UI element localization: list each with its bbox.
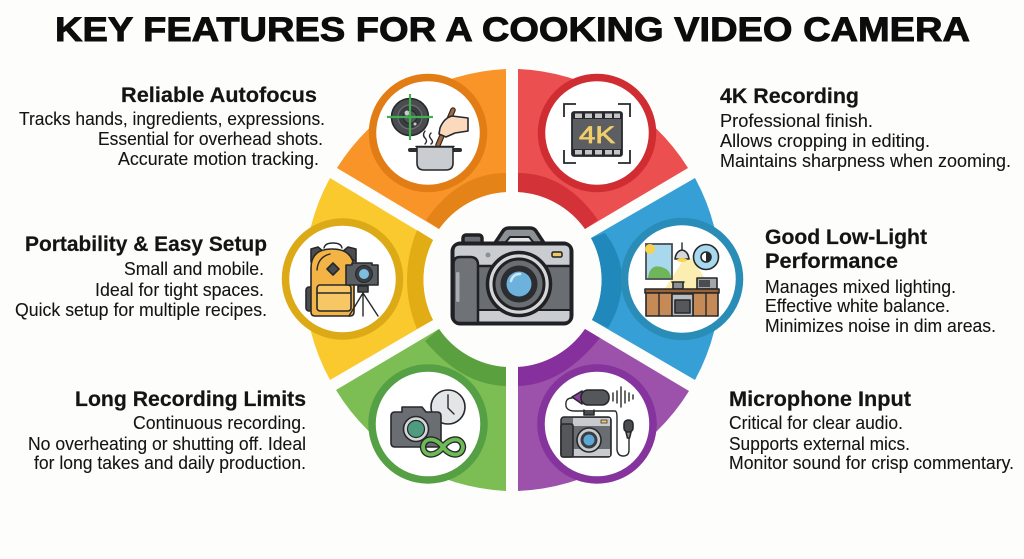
text block: microphone input: Microphone Input [729, 387, 911, 411]
text block: long recording limits: for long takes and daily production. [34, 453, 306, 473]
text block: good low-light performance: Manages mixed lighting. [765, 277, 956, 297]
icon: 4K film frame: 4K [579, 122, 615, 149]
text block: reliable autofocus: Reliable Autofocus [121, 83, 317, 107]
panel: portability segment [286, 178, 433, 380]
text block: good low-light performance: Good Low-Light [765, 225, 927, 249]
text block: reliable autofocus: Essential for overhead shots. [98, 129, 323, 149]
text block: microphone input: Supports external mics. [729, 434, 910, 454]
icon: camera, clock and infinity [391, 390, 465, 454]
panel: low-light segment [591, 178, 740, 380]
text block: reliable autofocus: Tracks hands, ingredients, expressions. [19, 109, 325, 129]
icon: autofocus lens and cooking pot [387, 94, 468, 170]
text block: 4K recording: Maintains sharpness when zooming. [720, 151, 1011, 171]
text block: long recording limits [28, 387, 306, 473]
panel: reliable autofocus segment [337, 69, 506, 229]
text block: 4K recording: Professional finish. [720, 111, 873, 131]
icon: kitchen with window, lamp and exposure dial [645, 243, 719, 316]
text block: reliable autofocus: Accurate motion tracking. [118, 149, 319, 169]
text block: microphone input: Critical for clear audio. [729, 413, 903, 433]
text block: long recording limits: Continuous recording. [133, 413, 306, 433]
panel: long recording limits segment [336, 329, 506, 491]
text block: microphone input [729, 387, 1014, 473]
text block: good low-light performance [765, 225, 996, 336]
text block: 4K recording: Allows cropping in editing. [720, 131, 930, 151]
text block: good low-light performance: Performance [765, 249, 898, 273]
text block: 4K recording: 4K Recording [720, 84, 859, 108]
text block: portability and easy setup: Ideal for tight spaces. [95, 280, 264, 300]
text block: portability and easy setup: Quick setup for multiple recipes. [15, 300, 267, 320]
text block: reliable autofocus [19, 83, 325, 169]
text block: long recording limits: No overheating or shutting off. Ideal [28, 434, 306, 454]
text block: portability and easy setup: Small and mobile. [124, 259, 264, 279]
text block: 4K recording [720, 84, 1011, 171]
text block: microphone input: Monitor sound for crisp commentary. [729, 453, 1014, 473]
text block: good low-light performance: Minimizes noise in dim areas. [765, 316, 996, 336]
panel: microphone input segment [518, 329, 689, 491]
text block: good low-light performance: Effective white balance. [765, 296, 950, 316]
text block: portability and easy setup [15, 232, 267, 320]
icon: camera with external microphones [561, 387, 633, 457]
panel: 4K recording segment [518, 69, 688, 229]
icon: 4K film frame [564, 104, 630, 163]
icon: backpack and tripod camera [306, 243, 378, 316]
icon: central camera [452, 228, 572, 324]
text block: portability and easy setup: Portability & Easy Setup [25, 232, 267, 256]
title: KEY FEATURES FOR A COOKING VIDEO CAMERA [55, 11, 970, 49]
text block: long recording limits: Long Recording Limits [75, 387, 306, 411]
